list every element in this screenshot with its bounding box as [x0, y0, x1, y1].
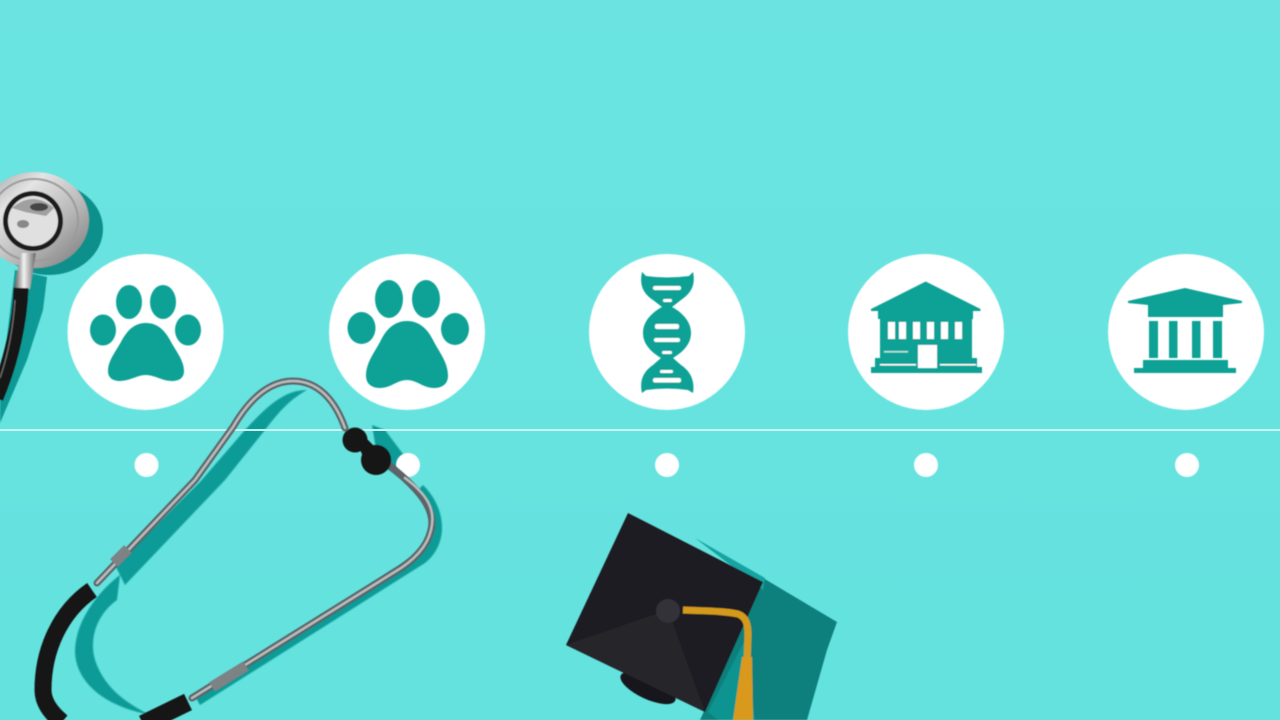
icon: paw 2 [348, 280, 469, 388]
timeline line [0, 429, 1280, 431]
white circles row [68, 254, 1264, 410]
stethoscope chest piece [0, 172, 103, 423]
icon: paw 1 [90, 285, 201, 381]
icon: DNA helix [641, 272, 694, 393]
stethoscope connector [342, 428, 391, 475]
stethoscope tubing [43, 381, 432, 720]
timeline dots [134, 453, 1199, 477]
graduation cap [566, 513, 837, 720]
icon: temple with columns [1128, 288, 1242, 373]
icon: building with door [871, 282, 982, 373]
stethoscope shadow [75, 390, 442, 715]
